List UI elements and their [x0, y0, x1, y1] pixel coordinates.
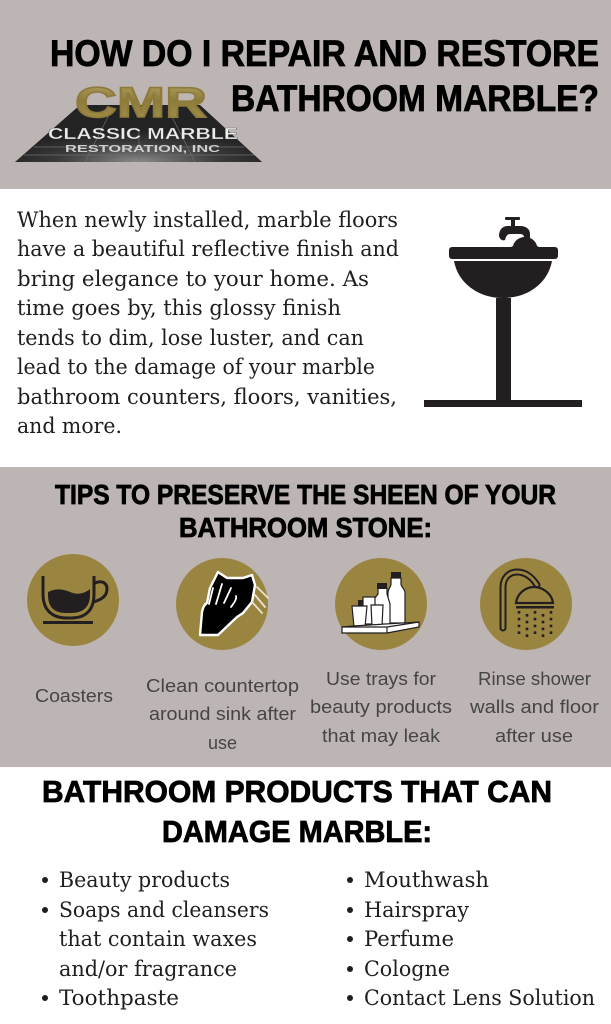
- list: left column: [42, 868, 269, 1010]
- list: right column: Perfume: [364, 927, 454, 951]
- tips heading: TIPS TO PRESERVE THE SHEEN OF YOUR: [55, 479, 556, 510]
- list: left column: Beauty products: [59, 868, 230, 892]
- logo: Classic Marble Restoration: CLASSIC MARBLE: [48, 126, 238, 143]
- intro text: bring elegance to your home. As: [17, 267, 369, 291]
- products heading: BATHROOM PRODUCTS THAT CAN: [42, 774, 552, 809]
- list: left column: that contain waxes: [59, 927, 257, 951]
- list: right column: Hairspray: [364, 898, 469, 922]
- logo: Classic Marble Restoration: [15, 79, 262, 162]
- icon: coffee cup: [27, 554, 119, 646]
- intro text: [17, 208, 399, 438]
- intro text: time goes by, this glossy finish: [17, 296, 341, 320]
- tips heading: BATHROOM STONE:: [179, 512, 432, 543]
- title: [50, 33, 599, 119]
- label: rinse shower: [469, 668, 599, 746]
- list: right column: Cologne: [364, 957, 450, 981]
- label: clean countertop: [146, 675, 299, 753]
- intro text: When newly installed, marble floors: [17, 208, 398, 232]
- label: clean countertop: Clean countertop: [146, 675, 299, 696]
- icon: tray of beauty products: [335, 558, 427, 650]
- intro text: and more.: [17, 414, 122, 438]
- icon: pedestal sink: [424, 217, 582, 407]
- list: right column: Mouthwash: [364, 868, 489, 892]
- list: left column: and/or fragrance: [59, 957, 237, 981]
- panel: tips: [0, 467, 611, 767]
- label: use trays: that may leak: [322, 725, 441, 746]
- intro text: lead to the damage of your marble: [17, 355, 375, 379]
- label: rinse shower: Rinse shower: [478, 668, 591, 689]
- products heading: [42, 774, 552, 849]
- label: rinse shower: walls and floor: [469, 696, 599, 717]
- label: use trays: beauty products: [310, 696, 452, 717]
- label: use trays: [310, 668, 452, 746]
- intro text: bathroom counters, floors, vanities,: [17, 385, 397, 409]
- icon: shower head: [480, 558, 572, 650]
- logo: Classic Marble Restoration: RESTORATION, INC: [65, 143, 221, 155]
- tips heading: [55, 479, 556, 543]
- panel: header: [0, 0, 611, 189]
- products heading: DAMAGE MARBLE:: [162, 814, 432, 849]
- list: left column: Soaps and cleansers: [59, 898, 269, 922]
- panel: introduction: [0, 189, 611, 467]
- logo: Classic Marble Restoration: CMR: [75, 79, 207, 127]
- list: right column: Contact Lens Solution: [364, 986, 595, 1010]
- intro text: tends to dim, lose luster, and can: [17, 326, 364, 350]
- intro text: have a beautiful reflective finish and: [17, 237, 399, 261]
- label: clean countertop: around sink after: [149, 703, 296, 724]
- label: coasters: Coasters: [35, 685, 113, 706]
- list: right column: [347, 868, 595, 1010]
- list: left column: Toothpaste: [59, 986, 179, 1010]
- icon: hand with cloth: [176, 558, 268, 650]
- label: rinse shower: after use: [495, 725, 573, 746]
- label: use trays: Use trays for: [326, 668, 436, 689]
- panel: damaging products: [0, 767, 611, 1024]
- label: clean countertop: use: [208, 732, 237, 753]
